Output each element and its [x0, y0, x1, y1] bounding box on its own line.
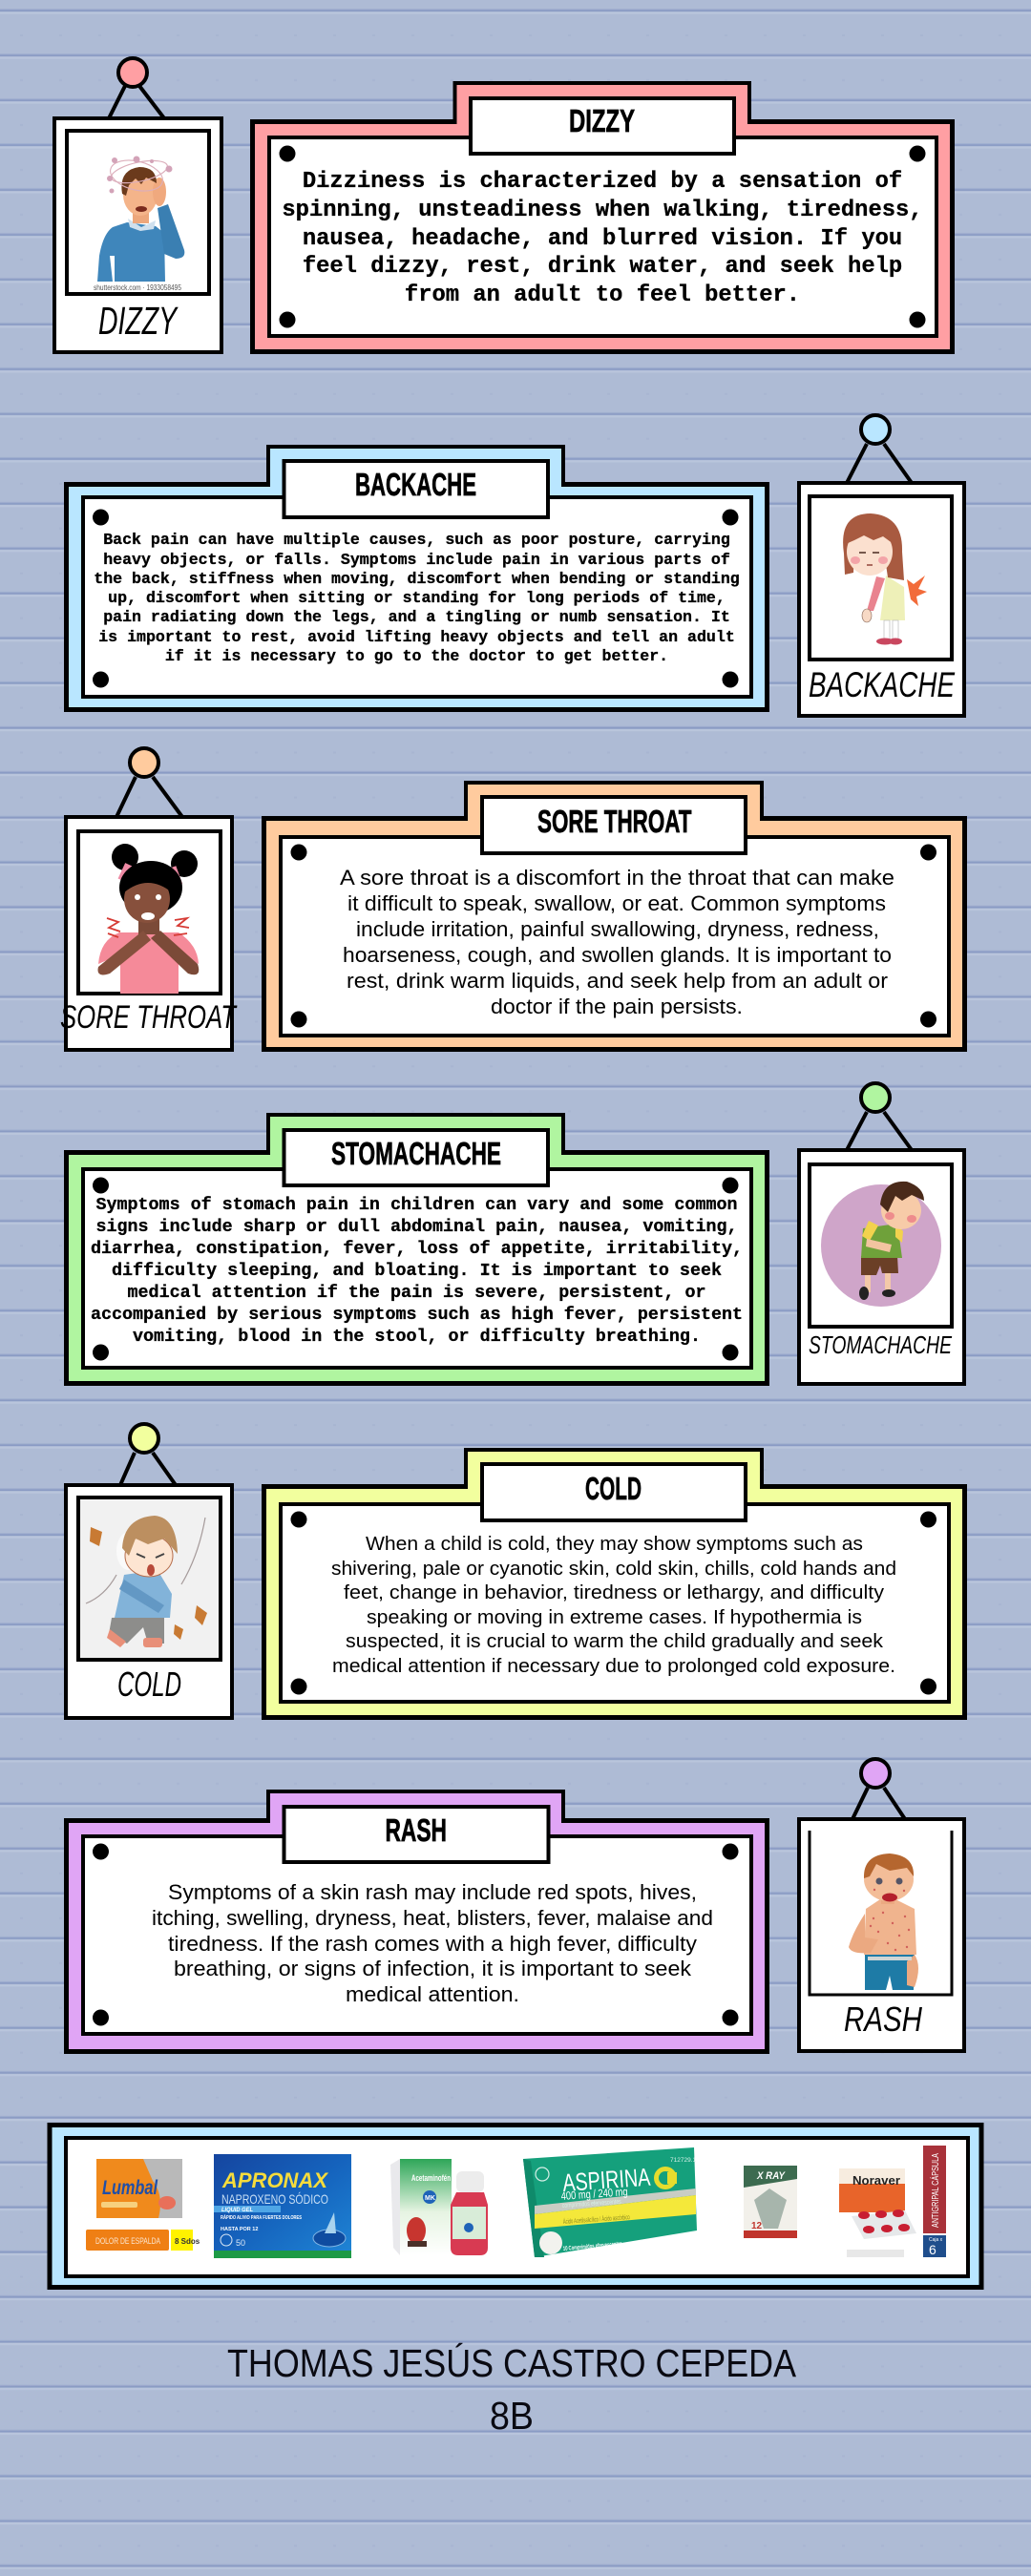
text: sore throat: rest, drink warm liquids, and seek help from an adult or — [347, 969, 888, 993]
text: sore throat: it difficult to speak, swallow, or eat. Common symptoms — [347, 891, 886, 915]
label: sore throat: SORE THROAT — [60, 999, 238, 1036]
text: backache — [94, 531, 740, 665]
text: backache: Back pain can have multiple causes, such as poor posture, carrying — [103, 531, 730, 549]
panel: rash description — [67, 1791, 768, 2052]
panel: medicines — [50, 2125, 981, 2287]
medicine: X Ray — [744, 2166, 797, 2238]
footer: class: 8B — [490, 2394, 534, 2438]
text: stomachache: accompanied by serious symptoms such as high fever, persistent — [91, 1305, 743, 1325]
text: dizzy: feel dizzy, rest, drink water, and seek help — [303, 254, 902, 280]
text: sore throat: include irritation, painful swallowing, dryness, redness, — [356, 917, 879, 941]
text: stomachache — [91, 1195, 743, 1347]
text: rash: breathing, or signs of infection, it is important to seek — [174, 1957, 692, 1980]
panel: sore throat description — [263, 783, 964, 1050]
text: cold: feet, change in behavior, tiredness or lethargy, and difficulty — [344, 1582, 884, 1603]
panel: dizzy description — [252, 83, 953, 351]
medicine: Aspirina C: Ácido Acetilsalicílico / Ácido ascórbico — [563, 2212, 630, 2226]
icon: girl with backache — [843, 513, 927, 645]
label: cold: COLD — [117, 1665, 181, 1704]
panel: rash picture card — [799, 1759, 964, 2051]
text: dizzy: Dizziness is characterized by a sensation of — [303, 169, 902, 195]
text: dizzy: from an adult to feel better. — [405, 283, 800, 308]
icon: girl with sore throat — [97, 844, 199, 994]
text: rash: medical attention. — [346, 1982, 519, 2006]
medicine: Lumbal — [86, 2159, 200, 2251]
icon: dizzy man — [97, 156, 184, 282]
text: cold: When a child is cold, they may show symptoms such as — [366, 1534, 863, 1555]
panel: dizzy picture card — [54, 58, 221, 352]
label: backache: BACKACHE — [809, 665, 956, 704]
text: cold: medical attention if necessary due to prolonged cold exposure. — [332, 1656, 895, 1677]
text: sore throat — [340, 866, 894, 1018]
text: rash: itching, swelling, dryness, heat, blisters, fever, malaise and — [152, 1906, 713, 1930]
medicine: Apronax: NAPROXENO SÓDICO — [221, 2191, 328, 2207]
text: sore throat: A sore throat is a discomfort in the throat that can make — [340, 866, 894, 890]
medicine: Acetaminofen: Acetaminofén — [411, 2173, 451, 2183]
medicine: Apronax: HASTA POR 12 — [221, 2227, 258, 2232]
text: backache: is important to rest, avoid lifting heavy objects and tell an adult — [98, 628, 735, 646]
text: dizzy: spinning, unsteadiness when walking, tiredness, — [282, 198, 923, 223]
text: stomachache: difficulty sleeping, and bloating. It is important to seek — [112, 1261, 722, 1281]
medicine: Noraver — [839, 2146, 946, 2257]
text: backache: the back, stiffness when moving, discomfort when bending or standing — [94, 570, 740, 588]
icon: boy with rash — [849, 1853, 918, 1990]
text: backache: if it is necessary to go to the doctor to get better. — [165, 647, 668, 665]
medicine: Aspirina C: ASPIRINA — [561, 2163, 652, 2197]
label: dizzy: DIZZY — [98, 299, 179, 343]
text: rash: Symptoms of a skin rash may include red spots, hives, — [168, 1880, 697, 1904]
text: dizzy — [282, 169, 923, 308]
text: cold: suspected, it is crucial to warm the child gradually and seek — [346, 1631, 884, 1652]
medicine: Apronax: 50 — [236, 2238, 245, 2248]
panel: backache description — [67, 447, 768, 710]
heading: dizzy: DIZZY — [569, 103, 635, 138]
heading: rash: RASH — [386, 1812, 447, 1848]
heading: cold: COLD — [585, 1471, 642, 1506]
text: stomachache: Symptoms of stomach pain in children can vary and some common — [95, 1195, 738, 1215]
footer: author name: THOMAS JESÚS CASTRO CEPEDA — [227, 2341, 797, 2385]
text: sore throat: hoarseness, cough, and swollen glands. It is important to — [343, 943, 892, 967]
text: stomachache: medical attention if the pain is severe, persistent, or — [128, 1283, 705, 1303]
medicine: Noraver: Noraver — [852, 2173, 900, 2188]
medicine: Apronax — [214, 2154, 351, 2258]
text: stomachache: signs include sharp or dull abdominal pain, nausea, vomiting, — [95, 1217, 738, 1237]
text: sore throat: doctor if the pain persists. — [491, 995, 743, 1018]
panel: sore throat picture card — [60, 748, 238, 1050]
watermark: shutterstock.com · 1933058495 — [94, 283, 181, 292]
medicine: Noraver: Caja x — [929, 2237, 943, 2243]
panel: backache picture card — [799, 415, 964, 716]
label: rash: RASH — [844, 2000, 923, 2039]
label: stomachache: STOMACHACHE — [809, 1330, 952, 1359]
medicine: Lumbal: 8 Sdos — [175, 2237, 200, 2246]
medicine: X Ray: 12 — [751, 2221, 763, 2231]
medicine: Aspirina C: 400 mg / 240 mg — [560, 2185, 628, 2203]
panel: stomachache description — [67, 1115, 768, 1384]
heading: sore throat: SORE THROAT — [537, 804, 691, 839]
medicine: Lumbal: Lumbal — [102, 2177, 158, 2199]
text: stomachache: vomiting, blood in the stool, or difficulty breathing. — [133, 1327, 701, 1347]
medicine: Acetaminofen — [390, 2159, 488, 2255]
panel: cold description — [263, 1450, 964, 1718]
text: backache: pain radiating down the legs, and a tingling or numb sensation. It — [103, 608, 730, 626]
medicine: Acetaminofen: MK — [425, 2195, 435, 2202]
text: backache: heavy objects, or falls. Symptoms include pain in various parts of — [103, 551, 730, 569]
text: dizzy: nausea, headache, and blurred vision. If you — [303, 226, 902, 252]
heading: stomachache: STOMACHACHE — [331, 1136, 501, 1171]
text: cold: speaking or moving in extreme cases. If hypothermia is — [367, 1607, 862, 1628]
heading: backache: BACKACHE — [355, 467, 476, 502]
text: rash: tiredness. If the rash comes with a high fever, difficulty — [168, 1932, 698, 1956]
text: cold — [331, 1534, 896, 1677]
medicine: Aspirina C: comprimidos efervescentes — [562, 2199, 621, 2209]
medicine: Aspirina C — [523, 2147, 697, 2257]
text: stomachache: diarrhea, constipation, fever, loss of appetite, irritability, — [91, 1239, 743, 1259]
text: rash — [152, 1880, 713, 2006]
medicine: Noraver: ANTIGRIPAL CÁPSULA — [929, 2153, 941, 2228]
medicine: Aspirina C: 10 Comprimidos efervescentes — [563, 2241, 622, 2252]
medicine: Apronax: APRONAX — [221, 2168, 328, 2192]
text: backache: up, discomfort when sitting or standing for long periods of time, — [108, 589, 726, 607]
panel: stomachache picture card — [799, 1083, 964, 1384]
icon: shivering child — [86, 1516, 207, 1647]
medicine: X Ray: X RAY — [756, 2170, 786, 2182]
icon: boy with stomachache — [821, 1182, 941, 1307]
medicine: Lumbal: DOLOR DE ESPALDA — [95, 2236, 160, 2247]
medicine: Noraver: 6 — [929, 2242, 936, 2257]
medicine: Apronax: RÁPIDO ALIVIO PARA FUERTES DOLORES — [221, 2214, 302, 2221]
medicine: Apronax: LIQUID GEL — [221, 2208, 253, 2213]
medicine: Aspirina C: 712729.1 — [670, 2157, 696, 2164]
panel: cold picture card — [66, 1424, 232, 1718]
text: cold: shivering, pale or cyanotic skin, cold skin, chills, cold hands and — [331, 1559, 896, 1580]
